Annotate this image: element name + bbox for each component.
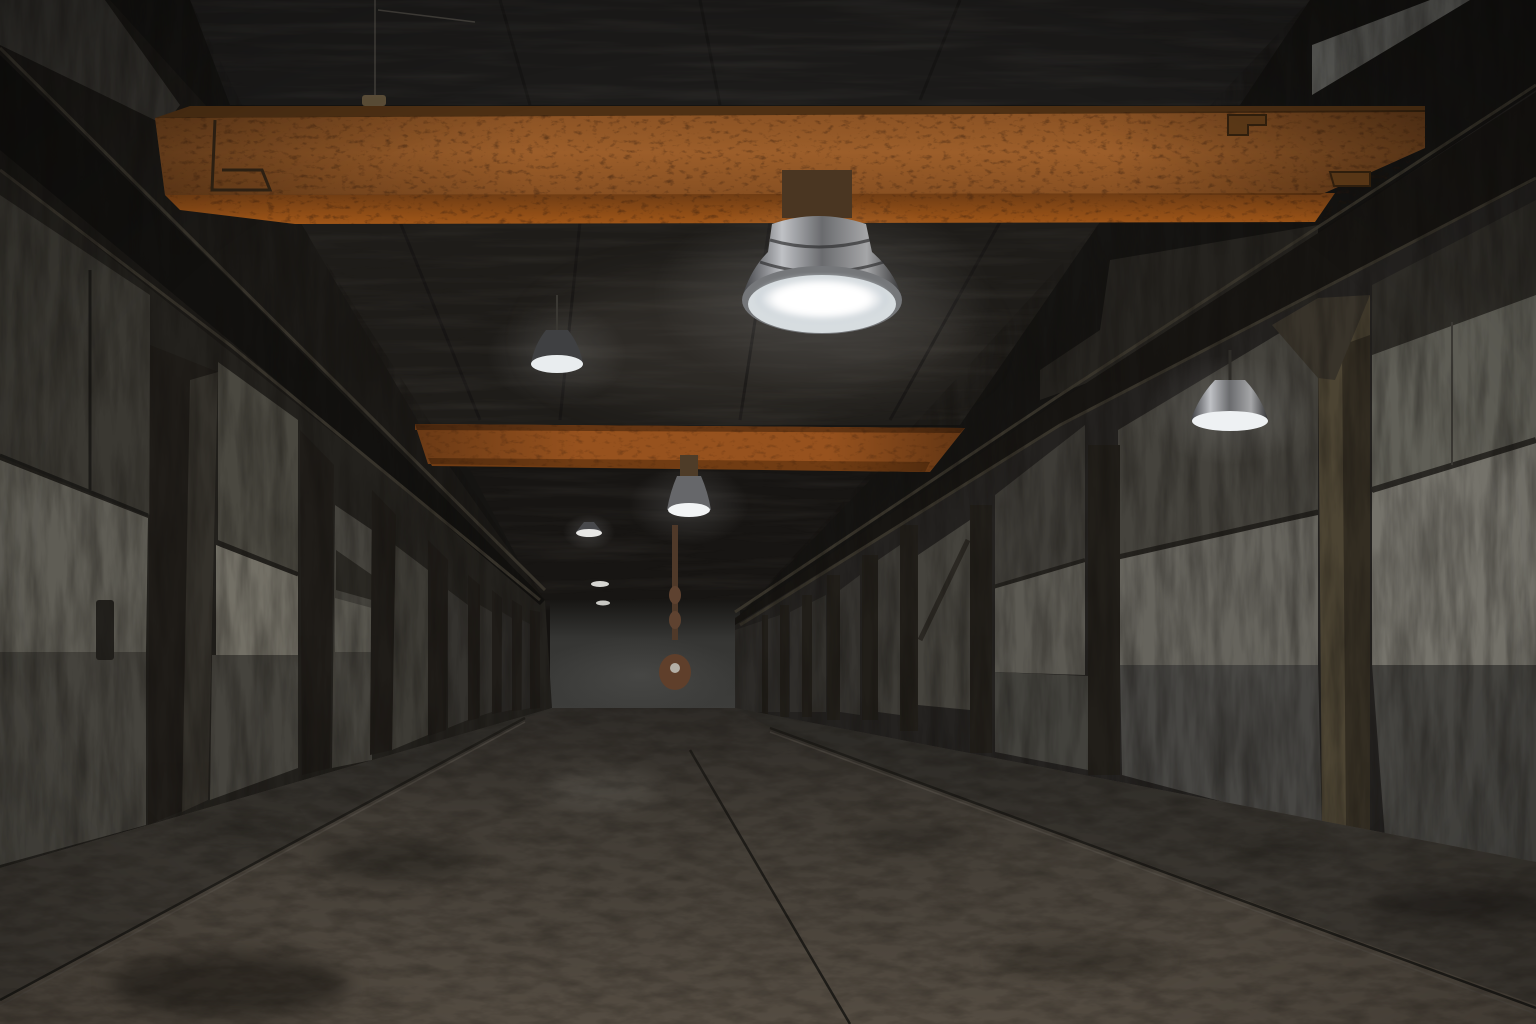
right wall: [735, 85, 1536, 862]
right panel H: [735, 520, 970, 715]
left panel A: [0, 195, 150, 865]
floor grain texture: [0, 732, 1536, 1024]
lamp: right wall: [1145, 350, 1315, 465]
lamp mount: [782, 170, 852, 218]
floor stains: [110, 820, 1536, 1017]
right panel E: [1372, 295, 1536, 862]
right roof rail: [735, 92, 1536, 625]
distant lamps: [563, 514, 615, 606]
left panel D: [392, 545, 530, 750]
beam bracket: right: [1228, 115, 1370, 186]
left wall: [0, 0, 552, 868]
right upper planks: [995, 200, 1536, 585]
walkway right: [735, 708, 1536, 1005]
ceiling: [0, 0, 1536, 620]
hanging hook: [659, 525, 691, 690]
left wall upper section: [0, 0, 545, 600]
lamp: centre: [629, 455, 749, 545]
lamp: left near: [487, 295, 627, 405]
left panel C: [332, 505, 372, 768]
second orange beam: [415, 424, 965, 472]
ceiling texture: [468, 25, 1097, 552]
right columns: [762, 445, 1120, 775]
large lamp: [652, 170, 992, 395]
left panel B: [210, 362, 298, 800]
main orange beam: [155, 106, 1427, 224]
right main post: [1272, 295, 1370, 835]
right panel G: [993, 560, 1088, 770]
right panel F: [1118, 512, 1322, 828]
walkway left: [0, 708, 552, 1000]
floor worn patch: [540, 768, 660, 812]
far wall: [540, 600, 740, 715]
floor: [0, 708, 1536, 1024]
window: upper right: [1312, 0, 1470, 95]
floor grooves: [0, 718, 1536, 1024]
left roof rail: [0, 55, 545, 605]
beam bracket: left: [212, 120, 270, 190]
left columns: [148, 345, 540, 825]
